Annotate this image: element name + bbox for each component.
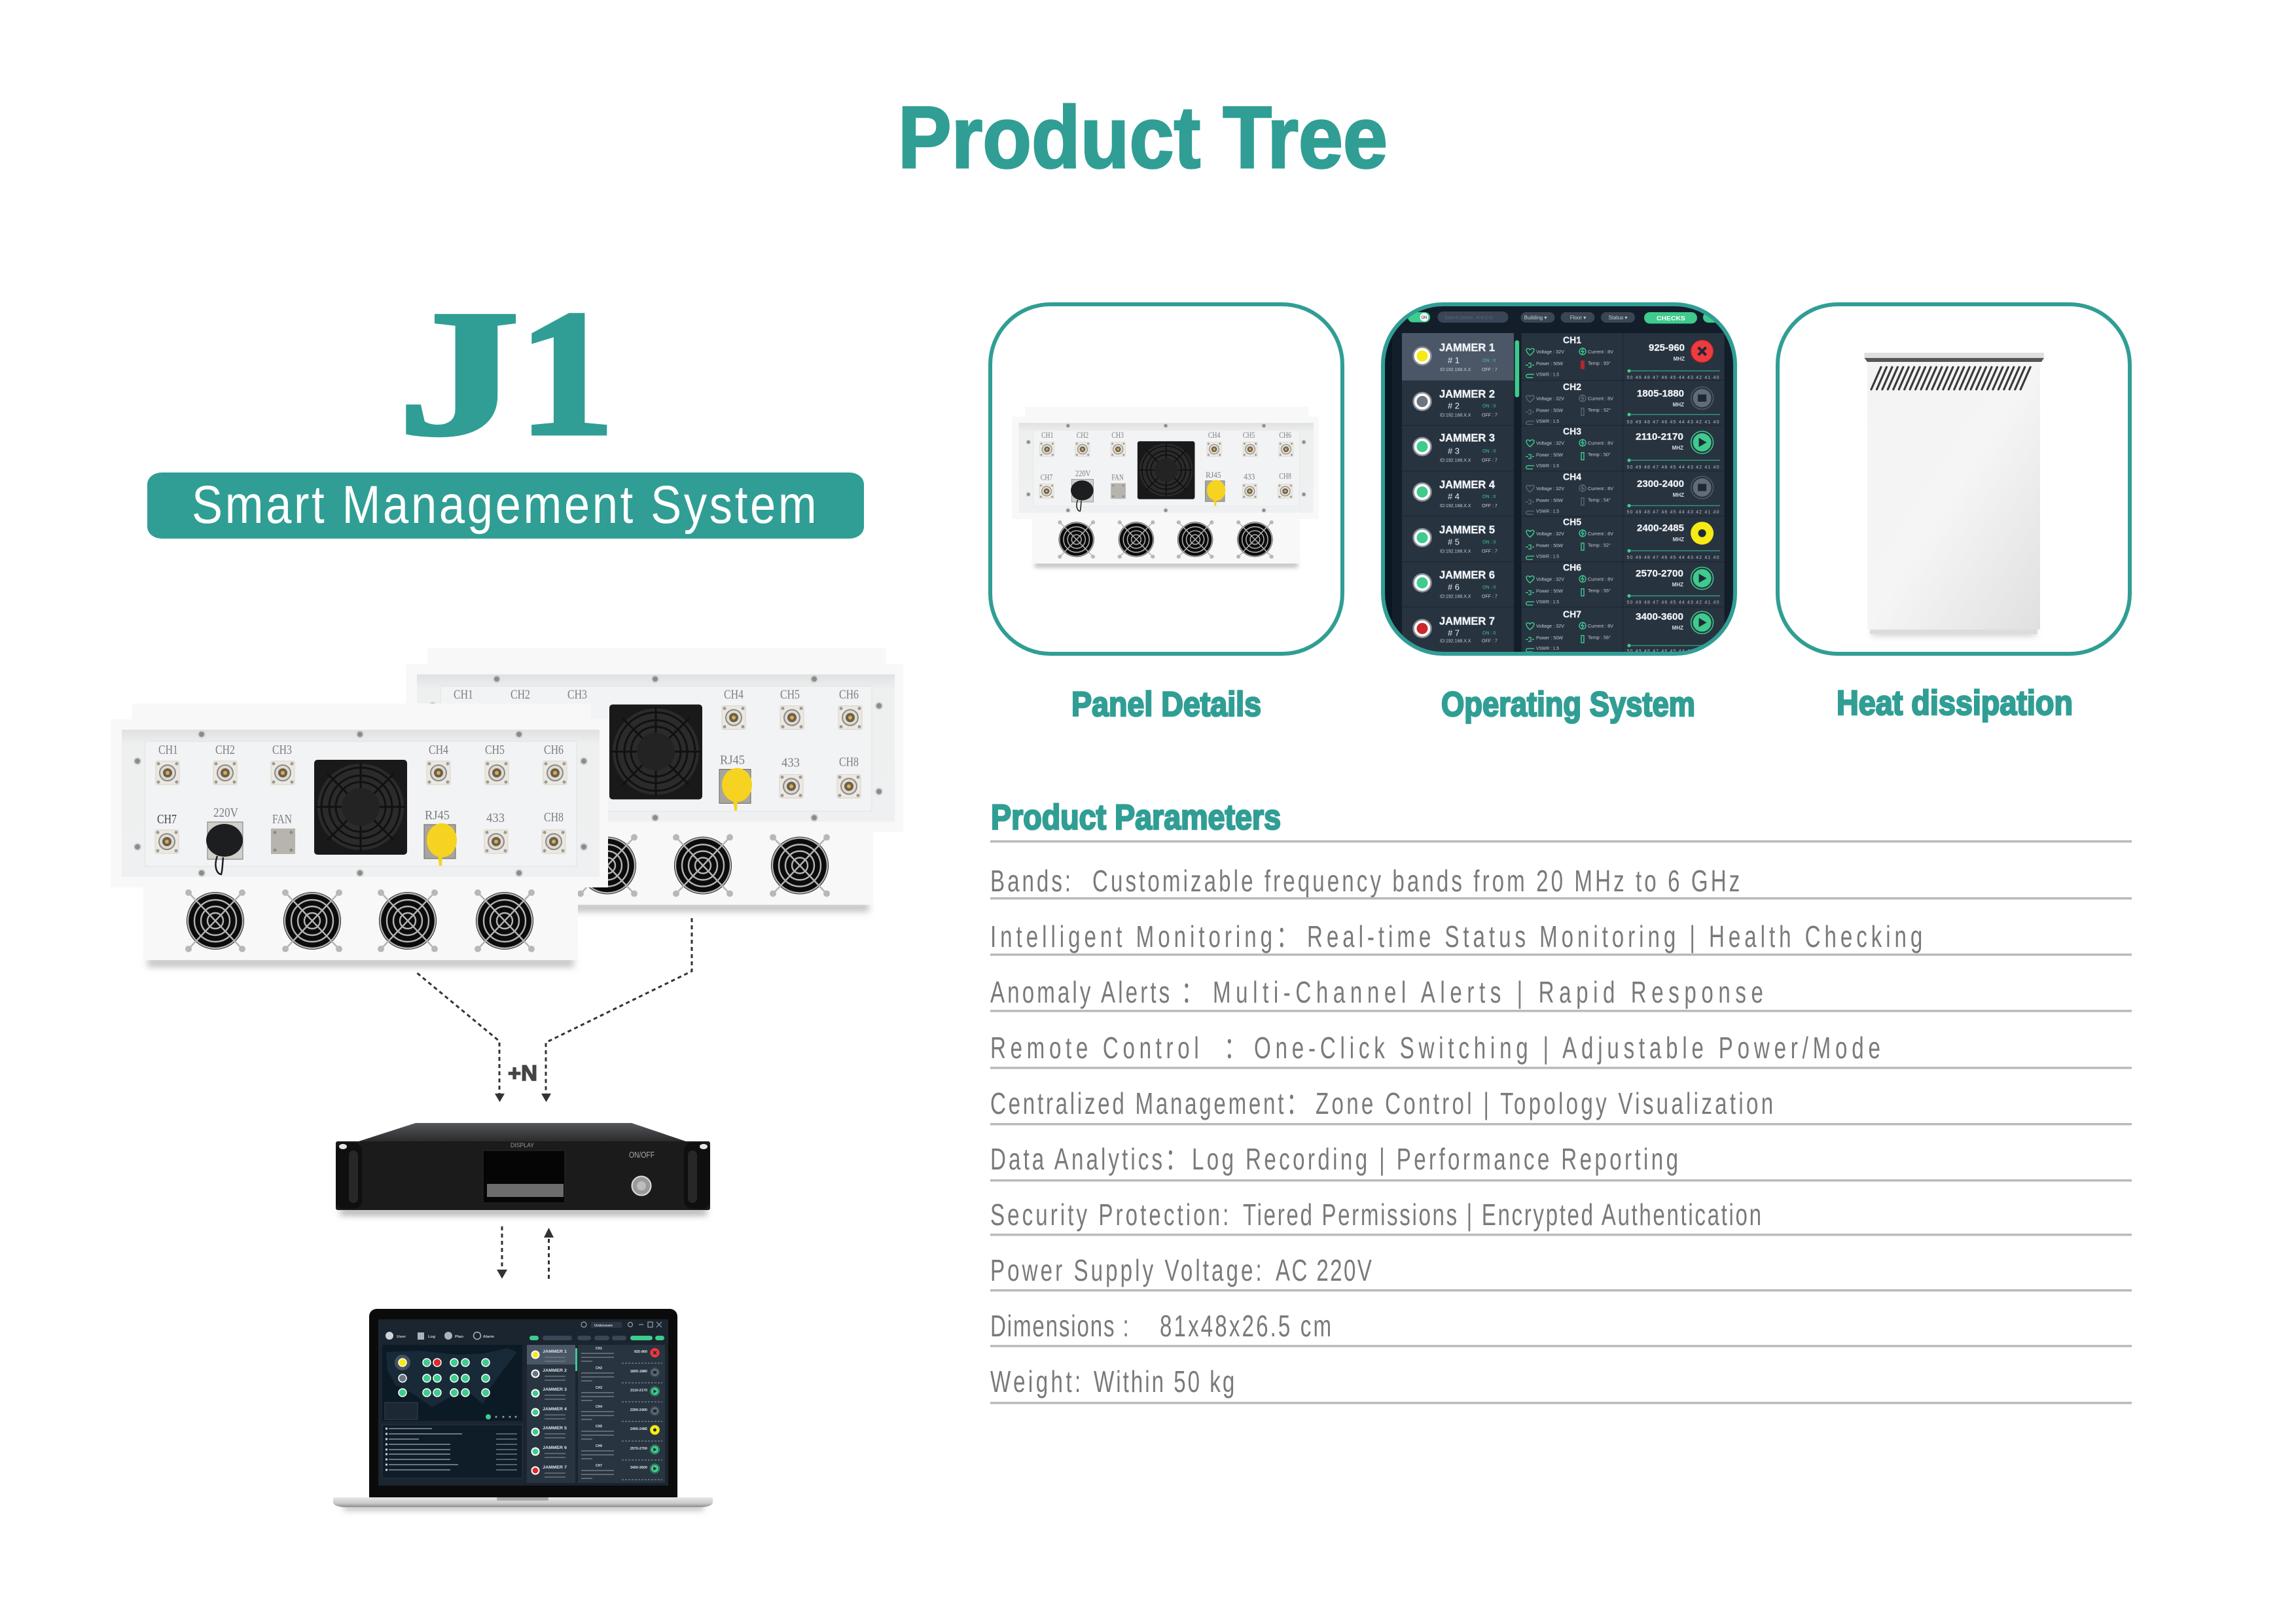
- jammer 5: ON : 0: [1482, 541, 1496, 545]
- channel 3: CH3: [1563, 426, 1581, 437]
- jammer 4: # 4: [1448, 491, 1460, 501]
- channel 1: Temp : 93°: [1588, 360, 1611, 366]
- frequency bands and controls: [1627, 340, 1720, 654]
- laptop jammer list: JAMMER 1: [543, 1349, 567, 1354]
- channel 2: Voltage : 32V: [1536, 396, 1564, 402]
- jammer 4: [1412, 480, 1498, 507]
- channel 5: [1526, 516, 1613, 560]
- laptop jammer list: JAMMER 7: [543, 1465, 567, 1470]
- caption: Panel Details: Panel Details: [1071, 685, 1261, 724]
- jammer 2: # 2: [1448, 401, 1460, 411]
- laptop jammer list: JAMMER 4: [543, 1407, 567, 1412]
- device: front jammer unit: CH1: [158, 743, 178, 757]
- frequency bands and controls: MHZ: [1672, 625, 1683, 631]
- laptop channel list: [578, 1345, 665, 1483]
- laptop nav bar: Plan: [455, 1335, 464, 1339]
- laptop nav bar: User: [397, 1335, 406, 1339]
- jammer 5: [1414, 524, 1498, 554]
- arrow: controller to laptop: [497, 1226, 507, 1279]
- channel 7: Temp : 56°: [1588, 635, 1611, 641]
- channel 4: Current : 8V: [1588, 486, 1613, 491]
- channel 2: [1526, 382, 1613, 425]
- jammer 7: JAMMER 7: [1439, 615, 1495, 627]
- os jammer list: [1402, 333, 1519, 656]
- laptop nav bar: Alarm: [483, 1335, 494, 1339]
- channel 1: Power : 50W: [1536, 361, 1564, 366]
- frequency bands and controls: 50 49 48 47 46 45 44 43 42 41 40: [1627, 601, 1719, 605]
- parameter: data analytics: Data Analytics：: [990, 1143, 1187, 1176]
- os top bar: Status ▾: [1609, 315, 1627, 321]
- parameter: security protection: Tiered Permissions | Encrypted Authentication: [1243, 1199, 1761, 1232]
- channel 4: VSWR : 1.5: [1536, 508, 1559, 514]
- parameter: weight: Within 50 kg: [1094, 1366, 1234, 1399]
- channel 4: CH4: [1563, 471, 1582, 482]
- panel details device front view: CH8: [1279, 472, 1291, 481]
- channel 1: VSWR : 1.5: [1536, 372, 1559, 377]
- device: front jammer unit: CH4: [429, 743, 448, 757]
- parameter: bands: Customizable frequency bands from 20 MHz to 6 GHz: [1092, 865, 1740, 898]
- channel 2: Power : 50W: [1536, 408, 1564, 414]
- device: rack controller: ON/OFF: [629, 1150, 655, 1160]
- jammer 3: [1414, 431, 1498, 463]
- laptop jammer list: JAMMER 3: [543, 1387, 567, 1392]
- caption: Operating System: Operating System: [1441, 685, 1695, 724]
- jammer 3: OFF : 7: [1482, 458, 1498, 463]
- channel 6: VSWR : 1.5: [1536, 599, 1559, 605]
- channel 1: Voltage : 32V: [1536, 349, 1564, 355]
- channel 2: Temp : 52°: [1588, 407, 1611, 413]
- title: Product Tree: [898, 89, 1388, 187]
- frequency bands and controls: MHZ: [1674, 356, 1685, 362]
- laptop jammer list: JAMMER 2: [543, 1368, 567, 1373]
- channel 5: Current : 8V: [1588, 531, 1613, 537]
- channel 4: Power : 50W: [1536, 497, 1564, 503]
- parameter: centralized management: Zone Control | Topology Visualization: [1316, 1088, 1773, 1120]
- jammer 4: JAMMER 4: [1439, 478, 1496, 491]
- device: front jammer unit: FAN: [272, 812, 292, 827]
- channel 3: VSWR : 1.5: [1536, 463, 1559, 469]
- panel details device front view: CH1: [1041, 431, 1054, 440]
- jammer 2: OFF : 7: [1482, 414, 1498, 418]
- jammer 5: # 5: [1448, 537, 1460, 547]
- jammer 3: ID:192.168.X.X: [1440, 458, 1471, 463]
- os top bar: [1408, 312, 1729, 323]
- parameter: dimensions: [990, 1310, 1331, 1343]
- jammer 2: ID:192.168.X.X: [1440, 414, 1471, 418]
- channel 6: Voltage : 32V: [1536, 577, 1564, 582]
- panel details device front view: CH2: [1077, 431, 1088, 440]
- frequency bands and controls: 2300-2400: [1637, 478, 1684, 490]
- jammer 4: OFF : 7: [1482, 504, 1498, 508]
- channel 1: CH1: [1563, 335, 1581, 346]
- channel 1: Current : 8V: [1588, 349, 1613, 355]
- channel 3: Current : 8V: [1588, 440, 1613, 446]
- laptop jammer list: JAMMER 5: [543, 1426, 567, 1431]
- laptop nav bar: Unknown: [594, 1324, 613, 1328]
- parameter: centralized management: Centralized Management：: [990, 1088, 1308, 1120]
- product logo: J1: 1: [518, 273, 615, 473]
- jammer 1: [1414, 342, 1498, 372]
- frequency bands and controls: 2400-2485: [1637, 523, 1684, 534]
- device: rear jammer unit: CH3: [567, 687, 587, 702]
- frequency bands and controls: MHZ: [1672, 582, 1683, 588]
- channel 1: [1526, 335, 1613, 378]
- jammer 7: OFF : 7: [1482, 639, 1498, 643]
- laptop channel list: 2400-2485: [630, 1427, 647, 1431]
- channel 3: Temp : 50°: [1588, 452, 1611, 457]
- device: rear jammer unit: [406, 648, 903, 912]
- laptop channel list: 2570-2700: [630, 1447, 647, 1451]
- parameter: centralized management: [990, 1088, 1773, 1120]
- device: rear jammer unit: CH6: [839, 687, 859, 702]
- panel: Operating System screenshot: [1381, 302, 1737, 656]
- parameter: security protection: Security Protection:: [990, 1199, 1229, 1232]
- jammer 2: JAMMER 2: [1439, 387, 1495, 401]
- arrow: laptop to controller: [544, 1228, 554, 1279]
- jammer 1: ON : 0: [1482, 359, 1496, 363]
- channel 5: Voltage : 32V: [1536, 531, 1564, 537]
- jammer 7: [1412, 616, 1498, 643]
- laptop nav bar: Log: [428, 1335, 435, 1339]
- section: Product Parameters: [990, 798, 2132, 1404]
- jammer 6: # 6: [1448, 582, 1460, 592]
- parameter: dimensions: Dimensions :: [990, 1310, 1129, 1343]
- parameter: intelligent monitoring: Intelligent Monitoring：: [990, 921, 1298, 954]
- os channel table: [1522, 333, 1725, 656]
- parameter: intelligent monitoring: Real-time Status Monitoring | Health Checking: [1307, 921, 1922, 954]
- laptop channel list: CH1: [596, 1347, 602, 1351]
- frequency bands and controls: MHZ: [1672, 445, 1683, 451]
- laptop channel list: CH4: [596, 1405, 602, 1409]
- channel 3: Power : 50W: [1536, 452, 1564, 458]
- channel 6: [1526, 562, 1613, 605]
- device: front jammer unit: CH5: [485, 743, 505, 757]
- channel 7: [1526, 609, 1613, 652]
- jammer 6: ON : 0: [1482, 586, 1496, 590]
- laptop jammer list: JAMMER 6: [543, 1446, 567, 1450]
- jammer 4: ID:192.168.X.X: [1440, 504, 1471, 508]
- parameter: power supply voltage: AC 220V: [1276, 1255, 1372, 1287]
- channel 7: CH7: [1563, 609, 1581, 620]
- frequency bands and controls: 3400-3600: [1636, 611, 1683, 622]
- laptop channel list: CH7: [596, 1464, 602, 1468]
- channel 4: Temp : 54°: [1588, 497, 1611, 503]
- jammer 1: # 1: [1448, 355, 1460, 365]
- laptop channel list: 2110-2170: [630, 1389, 647, 1393]
- channel 5: VSWR : 1.5: [1536, 553, 1559, 559]
- channel 6: Current : 8V: [1588, 577, 1613, 582]
- jammer 7: # 7: [1448, 628, 1460, 637]
- arrow: right unit to controller: [541, 918, 692, 1102]
- frequency bands and controls: 50 49 48 47 46 45 44 43 42 41 40: [1627, 510, 1719, 514]
- panel details device front view: FAN: [1111, 473, 1124, 482]
- panel details device front view: CH7: [1041, 473, 1052, 482]
- device: front jammer unit: CH7: [157, 812, 177, 827]
- panel details device front view: [1012, 407, 1319, 568]
- panel details device front view: CH3: [1111, 431, 1124, 440]
- device: rack controller: [336, 1123, 710, 1215]
- frequency bands and controls: 1805-1880: [1637, 388, 1684, 399]
- device: front jammer unit: CH2: [215, 743, 235, 757]
- frequency bands and controls: MHZ: [1673, 492, 1684, 498]
- frequency bands and controls: 925-960: [1649, 342, 1685, 353]
- laptop channel list: CH3: [596, 1386, 602, 1390]
- laptop channel list: CH5: [596, 1425, 602, 1429]
- parameter: remote control: Remote Control ：: [990, 1032, 1246, 1065]
- channel 7: VSWR : 1.5: [1536, 645, 1559, 651]
- device: rear jammer unit: CH2: [511, 687, 530, 702]
- device: rear jammer unit: CH1: [454, 687, 473, 702]
- product logo: J1: [397, 273, 615, 473]
- panel details device front view: CH6: [1279, 431, 1291, 440]
- parameter: weight: [990, 1366, 1234, 1399]
- parameter: weight: Weight:: [990, 1366, 1081, 1399]
- product logo: J1: J: [397, 273, 520, 473]
- laptop channel list: 925-960: [634, 1350, 647, 1354]
- frequency bands and controls: 50 49 48 47 46 45 44 43 42 41 40: [1627, 556, 1719, 560]
- channel 6: Temp : 55°: [1588, 588, 1611, 594]
- label: +N: +N: [508, 1061, 537, 1085]
- os top bar: Search Device : A-B-C-D: [1444, 314, 1494, 321]
- channel 3: [1526, 426, 1613, 469]
- parameter: security protection: [990, 1199, 1761, 1232]
- frequency bands and controls: 2570-2700: [1636, 568, 1683, 579]
- badge: Smart Management System: Smart Management System: [192, 475, 817, 535]
- device: front jammer unit: CH8: [544, 810, 564, 825]
- channel 3: Voltage : 32V: [1536, 440, 1564, 446]
- panel details device front view: 433: [1244, 472, 1255, 481]
- channel 2: CH2: [1563, 382, 1581, 393]
- device: rear jammer unit: CH5: [780, 687, 800, 702]
- channel 5: Power : 50W: [1536, 543, 1564, 548]
- frequency bands and controls: 50 49 48 47 46 45 44 43 42 41 40: [1627, 465, 1719, 470]
- parameter: bands: Bands:: [990, 865, 1071, 898]
- device: front jammer unit: CH6: [544, 743, 564, 757]
- os top bar: Floor ▾: [1570, 315, 1586, 321]
- laptop jammer list: [527, 1345, 577, 1483]
- jammer 2: ON : 0: [1482, 404, 1496, 408]
- device: front jammer unit: [111, 704, 608, 967]
- laptop channel list: 1805-1880: [630, 1370, 647, 1374]
- laptop map panel: [382, 1345, 522, 1421]
- panel details device front view: CH4: [1208, 431, 1220, 440]
- jammer 3: ON : 0: [1482, 449, 1496, 454]
- frequency bands and controls: MHZ: [1673, 537, 1684, 543]
- parameter: data analytics: Log Recording | Performance Reporting: [1192, 1143, 1678, 1176]
- os top bar: Building ▾: [1524, 315, 1547, 321]
- panel details device front view: CH5: [1243, 431, 1255, 440]
- panel: Heat dissipation: [1778, 304, 2130, 654]
- jammer 3: JAMMER 3: [1439, 431, 1495, 444]
- parameter: dimensions: 81x48x26.5 cm: [1160, 1310, 1331, 1343]
- jammer 5: OFF : 7: [1482, 550, 1498, 554]
- os top bar: CHECKS: [1657, 315, 1685, 322]
- channel 7: Current : 8V: [1588, 623, 1613, 629]
- device: rack controller: DISPLAY: [511, 1142, 535, 1149]
- channel 5: CH5: [1563, 516, 1581, 527]
- jammer 1: ID:192.168.X.X: [1440, 368, 1471, 372]
- device: front jammer unit: RJ45: [425, 808, 450, 823]
- device: rear jammer unit: CH4: [724, 687, 744, 702]
- channel 7: Power : 50W: [1536, 635, 1564, 641]
- laptop nav bar: [386, 1322, 664, 1340]
- frequency bands and controls: 50 49 48 47 46 45 44 43 42 41 40: [1627, 376, 1719, 380]
- parameter: anomaly alerts: Anomaly Alerts ：: [990, 976, 1203, 1009]
- jammer 5: JAMMER 5: [1439, 524, 1495, 536]
- jammer 6: OFF : 7: [1482, 595, 1498, 599]
- channel 4: Voltage : 32V: [1536, 486, 1564, 491]
- laptop event log: [382, 1425, 522, 1478]
- channel 2: VSWR : 1.5: [1536, 418, 1559, 424]
- jammer 6: [1414, 569, 1498, 599]
- frequency bands and controls: 2110-2170: [1636, 431, 1683, 442]
- device: rear jammer unit: CH8: [839, 755, 859, 770]
- panel: Panel Details: [990, 304, 1342, 654]
- frequency bands and controls: MHZ: [1673, 402, 1684, 408]
- jammer 1: JAMMER 1: [1439, 342, 1495, 354]
- device: front jammer unit: CH3: [272, 743, 292, 757]
- arrow: left unit to controller: [418, 973, 505, 1102]
- section heading: Product Parameters: [991, 798, 1281, 837]
- jammer 6: ID:192.168.X.X: [1440, 595, 1471, 599]
- jammer 7: ON : 0: [1482, 631, 1496, 635]
- os top bar: ON: [1422, 316, 1427, 320]
- device: rear jammer unit: 433: [781, 755, 800, 770]
- channel 6: Power : 50W: [1536, 588, 1564, 594]
- frequency bands and controls: 50 49 48 47 46 45 44 43 42 41 40: [1627, 420, 1719, 425]
- channel 2: Current : 8V: [1588, 396, 1613, 402]
- device side view with vents: [1864, 353, 2044, 635]
- channel 7: Voltage : 32V: [1536, 623, 1564, 629]
- parameter: intelligent monitoring: [990, 921, 1922, 954]
- jammer 5: ID:192.168.X.X: [1440, 550, 1471, 554]
- channel 5: Temp : 52°: [1588, 542, 1611, 548]
- channel 6: CH6: [1563, 562, 1581, 573]
- parameter: remote control: One-Click Switching | Adjustable Power/Mode: [1254, 1032, 1880, 1065]
- jammer 6: JAMMER 6: [1439, 569, 1495, 581]
- panel details device front view: RJ45: [1206, 471, 1221, 480]
- device: laptop with management software: [333, 1309, 713, 1510]
- panel details device front view: 220V: [1075, 469, 1090, 478]
- jammer 7: ID:192.168.X.X: [1440, 639, 1471, 643]
- laptop channel list: CH6: [596, 1444, 602, 1448]
- laptop channel list: CH2: [596, 1366, 602, 1370]
- jammer 4: ON : 0: [1482, 495, 1496, 499]
- laptop channel list: 2300-2400: [630, 1408, 647, 1412]
- device: rear jammer unit: RJ45: [720, 753, 745, 767]
- jammer 3: # 3: [1448, 446, 1460, 455]
- caption: Heat dissipation: Heat dissipation: [1837, 684, 2073, 722]
- laptop channel list: 3400-3600: [630, 1466, 647, 1470]
- jammer 1: OFF : 7: [1482, 368, 1498, 372]
- jammer 2: [1412, 390, 1498, 416]
- device: front jammer unit: 220V: [213, 806, 238, 820]
- device: front jammer unit: 433: [486, 811, 505, 825]
- channel 4: [1526, 471, 1613, 514]
- frequency bands and controls: 50 49 48 47 46 45 44 43 42 41 40: [1627, 649, 1719, 654]
- parameter: power supply voltage: Power Supply Voltage:: [990, 1255, 1262, 1287]
- parameter: anomaly alerts: Multi-Channel Alerts | Rapid Response: [1213, 976, 1763, 1009]
